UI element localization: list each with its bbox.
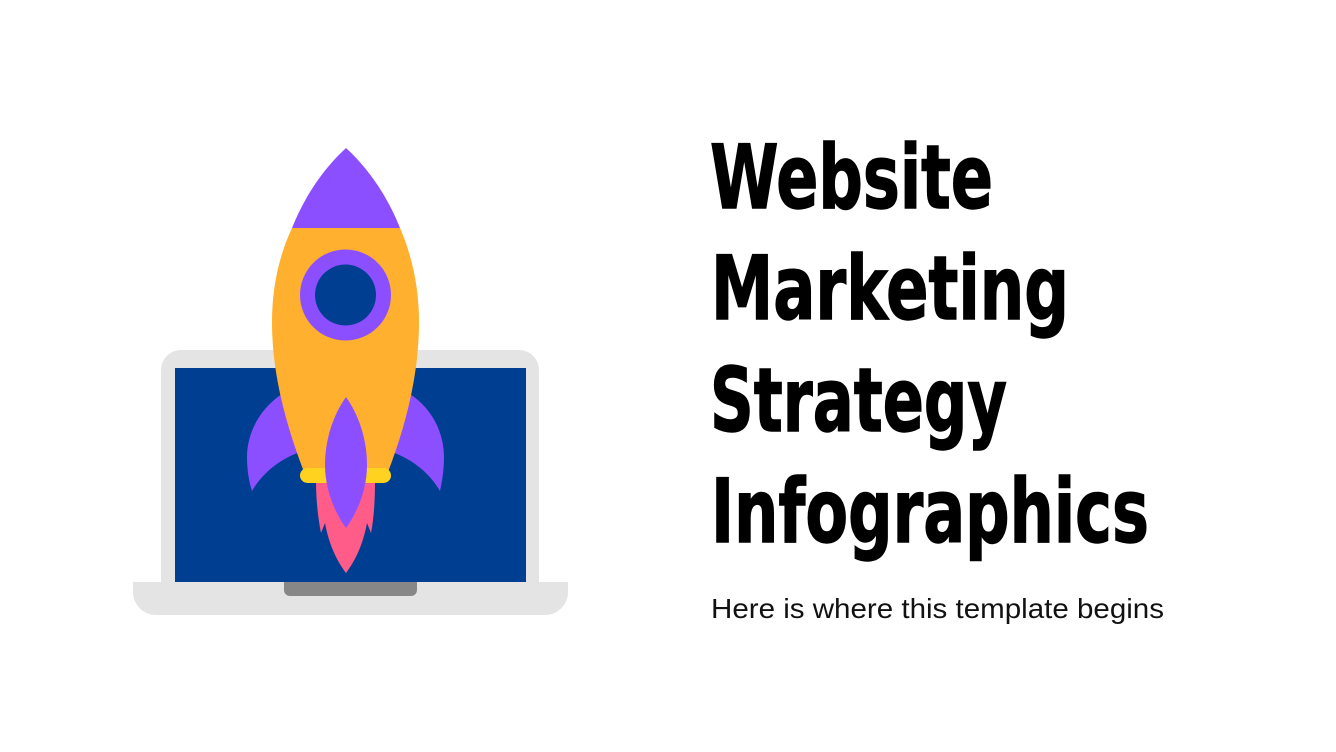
subtitle: Here is where this template begins xyxy=(711,593,1164,624)
rocket xyxy=(247,148,444,573)
title xyxy=(710,126,1149,563)
left fin xyxy=(247,394,300,491)
laptop screen xyxy=(175,368,526,582)
rocket nose cone xyxy=(292,148,400,228)
central purple fin xyxy=(325,397,367,528)
yellow engine band xyxy=(300,468,391,483)
right fin xyxy=(392,394,444,491)
laptop lid xyxy=(161,350,539,582)
title: Infographics xyxy=(711,460,1149,563)
title: Marketing xyxy=(711,237,1069,340)
illustration: rocket launching from laptop xyxy=(133,148,568,615)
porthole xyxy=(300,250,391,340)
laptop xyxy=(133,350,568,615)
laptop notch xyxy=(284,582,417,596)
flame xyxy=(316,480,375,573)
title: Website xyxy=(710,126,993,229)
rocket body xyxy=(272,228,419,472)
title: Strategy xyxy=(710,349,1007,452)
laptop base xyxy=(133,582,568,615)
